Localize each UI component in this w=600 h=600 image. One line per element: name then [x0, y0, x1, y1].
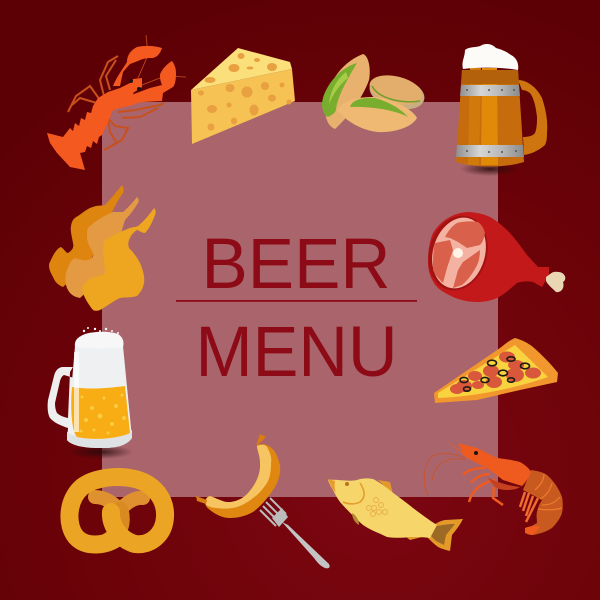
icon: sausage and fork	[196, 434, 330, 568]
icon: pistachios	[322, 54, 428, 132]
panel: menu card	[102, 102, 498, 497]
icon: ham	[420, 208, 565, 302]
icon: shrimp	[424, 437, 563, 535]
icon: pizza slice	[434, 338, 558, 403]
icon: crayfish	[47, 35, 186, 170]
icon: pretzel	[69, 477, 165, 545]
title: BEER MENU: BEER	[202, 225, 390, 304]
beer foam	[75, 327, 123, 348]
icon: wooden beer mug	[456, 44, 547, 176]
icon: roast chicken	[49, 185, 156, 311]
icon: glass of beer	[48, 327, 133, 459]
title: BEER MENU	[176, 225, 417, 392]
fork	[260, 498, 330, 568]
icon: fish	[328, 478, 463, 551]
icon: cheese wedge	[191, 48, 295, 144]
title: BEER MENU: MENU	[196, 313, 398, 392]
